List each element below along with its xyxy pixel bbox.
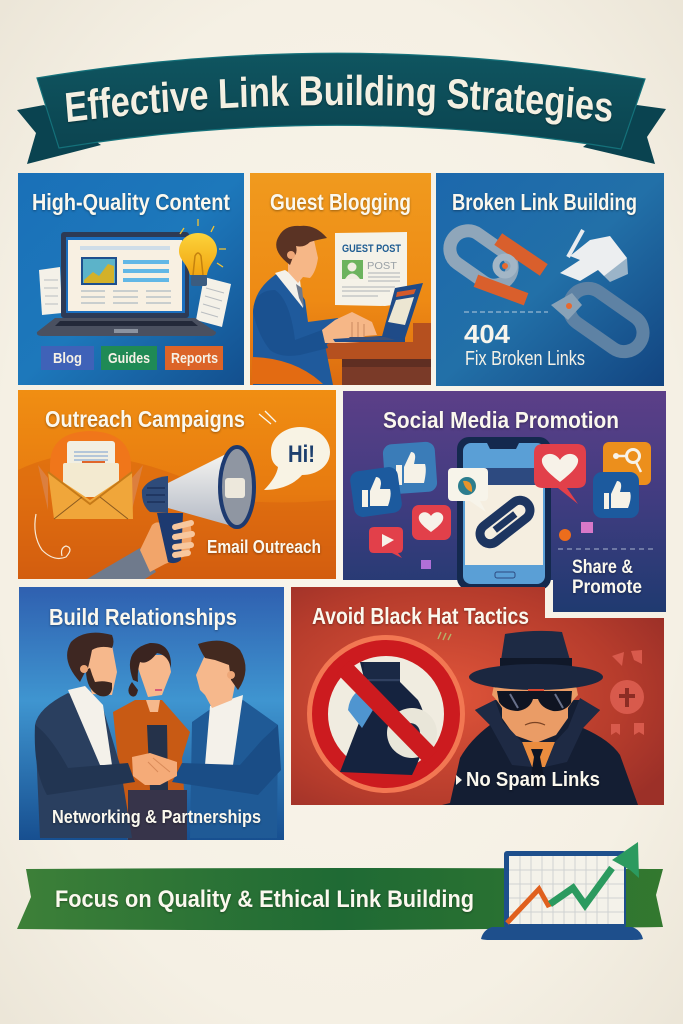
panel: guest blogging <box>250 173 431 385</box>
fix broken links: Fix Broken Links <box>465 348 585 370</box>
decorative squares <box>421 522 593 569</box>
icon: man at laptop <box>253 226 377 385</box>
icon: video tile <box>369 527 403 558</box>
icon: light bulb <box>179 219 226 286</box>
speech bubble <box>264 427 330 490</box>
icon: left paper <box>39 267 62 315</box>
panel: avoid black hat tactics <box>291 587 664 805</box>
icon: phone <box>457 437 551 590</box>
icon: no sign <box>307 635 465 793</box>
tag: guides <box>101 346 157 370</box>
footer banner <box>17 842 663 940</box>
icon: broken fragment <box>560 230 628 282</box>
heading: Avoid Black Hat Tactics <box>312 603 529 629</box>
email outreach label: Email Outreach <box>207 537 321 557</box>
heading: Outreach Campaigns <box>45 406 245 432</box>
desk <box>325 323 431 385</box>
heading: High-Quality Content <box>32 189 230 215</box>
heading: Broken Link Building <box>452 189 637 215</box>
icon: chain right <box>551 281 650 359</box>
footer text: Focus on Quality & Ethical Link Building <box>55 886 474 913</box>
icon: heart tile <box>534 444 586 504</box>
icon: envelope <box>38 431 143 519</box>
share and promote label: Share & <box>572 557 633 578</box>
icon: chair <box>252 357 323 384</box>
panel: build relationships <box>19 587 284 840</box>
tag: reports <box>165 346 223 370</box>
decorative sparks <box>259 411 276 424</box>
icon: broken chain left <box>443 224 538 297</box>
icon: black hat spy <box>442 631 638 805</box>
icon: sleeve and hand <box>87 522 192 579</box>
hand fingers <box>175 523 192 555</box>
icon: guest post paper: POST <box>367 261 397 272</box>
icon: heart tile <box>412 505 451 540</box>
decorative ticks <box>438 632 451 640</box>
icon: guest post paper <box>335 232 407 306</box>
404: 404 <box>464 319 511 349</box>
panel: social media promotion <box>343 391 666 612</box>
icon: woman <box>113 643 190 840</box>
panel: broken link building <box>436 173 664 386</box>
icon: laptop <box>333 283 423 342</box>
dashed line <box>558 548 653 550</box>
heading: Social Media Promotion <box>383 407 619 433</box>
icon: right paper <box>196 277 231 327</box>
icon: megaphone <box>142 447 254 563</box>
dashed line <box>464 311 548 313</box>
squiggle arrow <box>35 514 70 558</box>
no spam links label: No Spam Links <box>466 769 600 791</box>
heading: Guest Blogging <box>270 189 411 215</box>
icon: man with beard <box>35 633 135 838</box>
speech bubble: Hi! <box>288 441 315 468</box>
tag: guides: Guides <box>108 350 150 367</box>
title: Effective Link Building Strategies <box>66 74 612 126</box>
networking label: Networking & Partnerships <box>52 807 261 827</box>
title banner <box>17 52 666 164</box>
decorative flags <box>610 650 644 735</box>
icon: thumbs up tile <box>593 472 639 518</box>
panel: outreach campaigns <box>18 390 336 579</box>
icon: man in blue suit <box>172 641 281 838</box>
icon: share tile <box>603 442 651 485</box>
heading: Build Relationships <box>49 604 237 630</box>
icon: thumbs up tile <box>349 466 403 518</box>
icon: thumbs up tile <box>382 441 438 495</box>
tag: reports: Reports <box>171 350 218 367</box>
icon: chat tile <box>448 468 488 512</box>
share and promote label: Promote <box>572 577 642 598</box>
icon: guest post paper: GUEST POST <box>342 243 401 255</box>
icon: laptop with growth chart <box>481 842 643 940</box>
icon: laptop <box>37 232 216 336</box>
tag: blog: Blog <box>53 350 82 367</box>
icon: handshake <box>132 753 177 785</box>
plus mark <box>619 688 635 707</box>
share and promote label <box>572 557 642 598</box>
tag: blog <box>41 346 94 370</box>
panel: high-quality content <box>18 173 244 385</box>
